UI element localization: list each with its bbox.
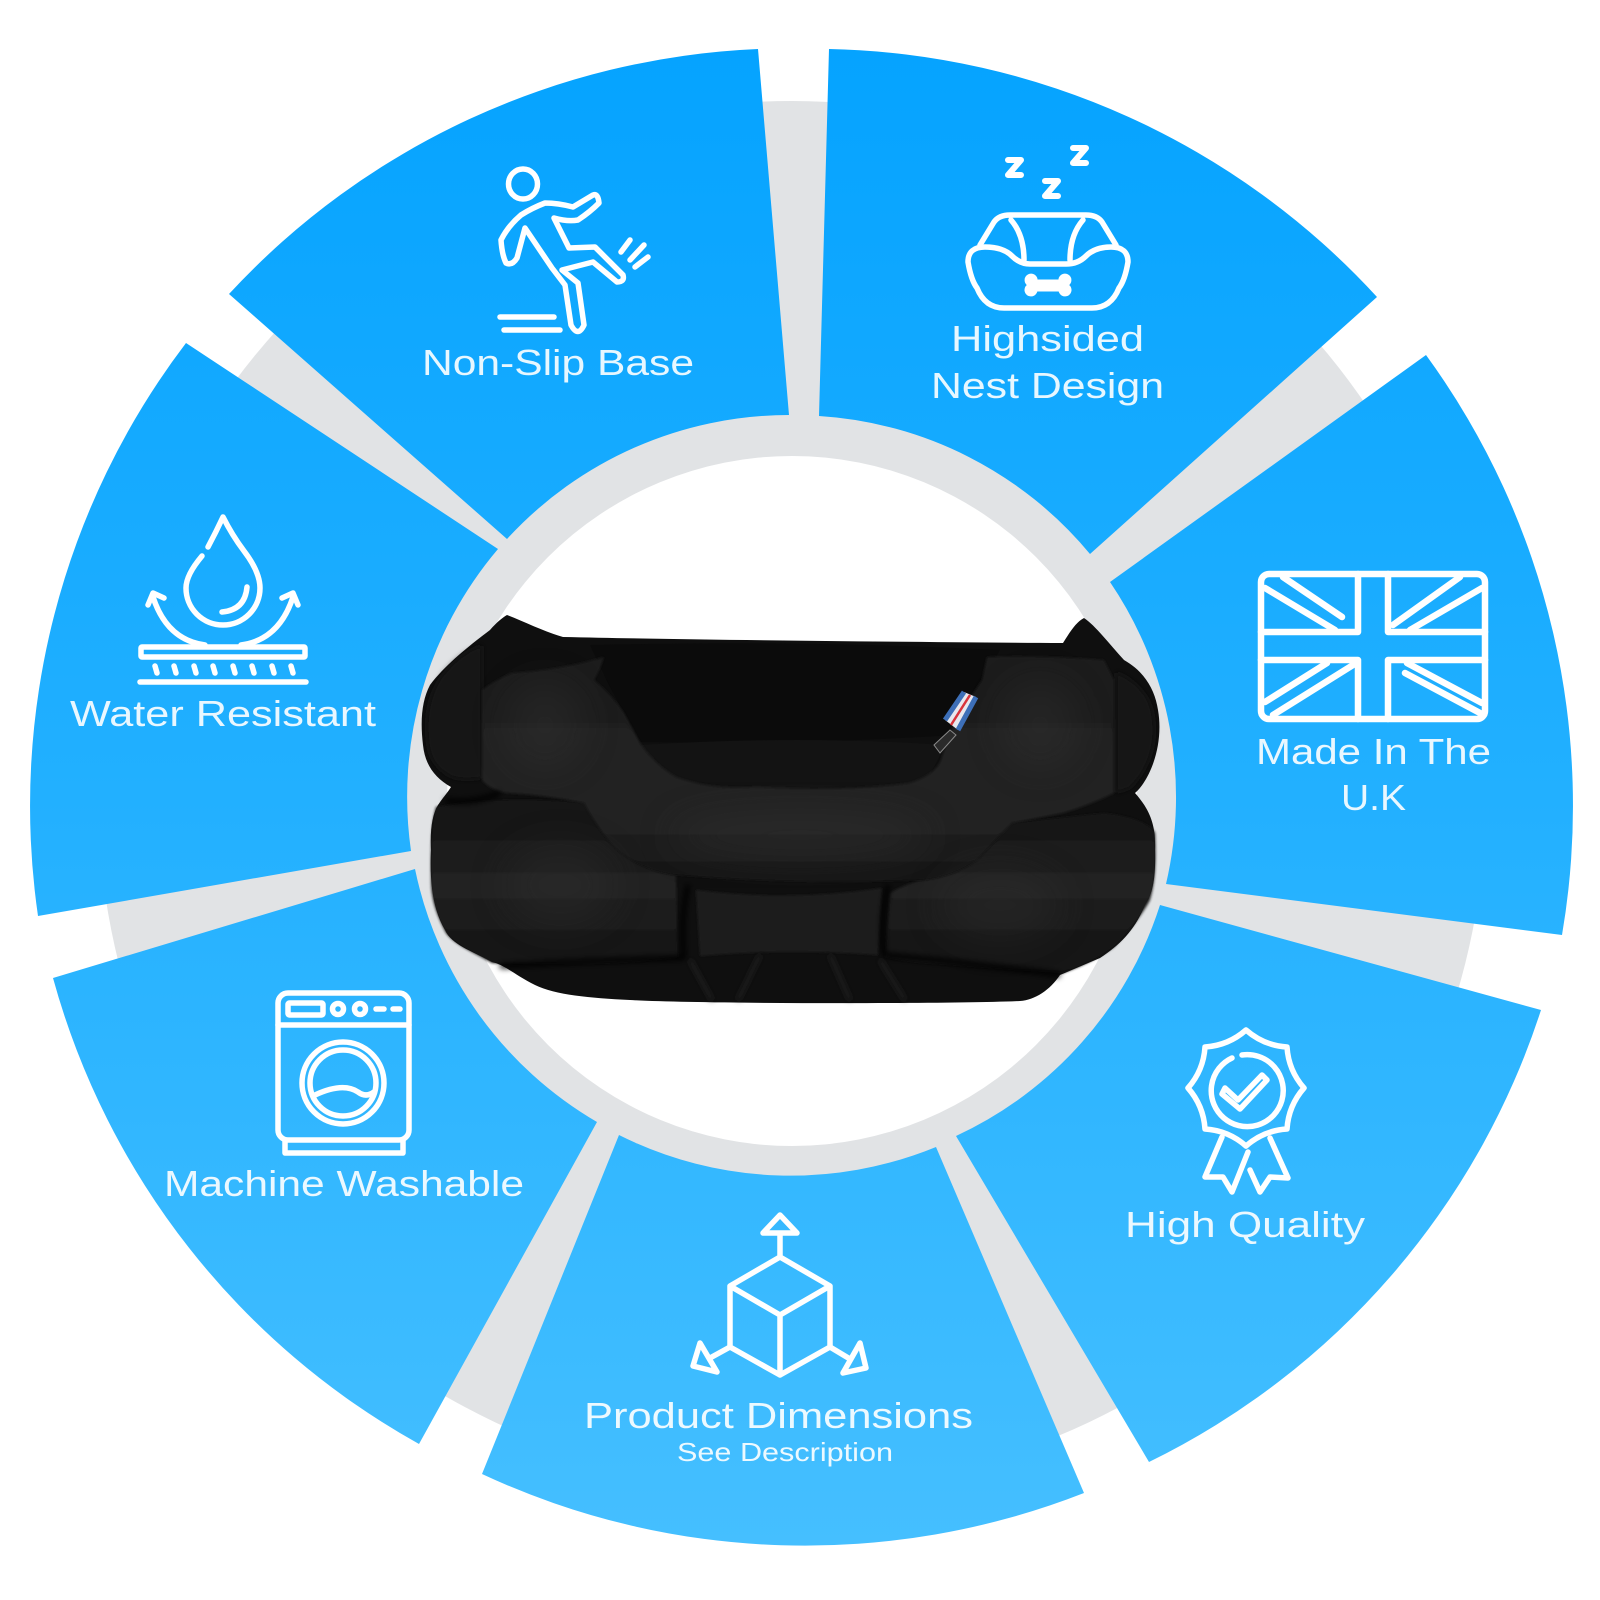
icon: water drop on fabric <box>140 517 306 682</box>
flag tag <box>945 692 976 730</box>
icon: cube with arrows <box>693 1215 866 1375</box>
segment shape <box>956 905 1541 1462</box>
product photo: black pet bed <box>422 615 1159 1003</box>
segment shape <box>1110 355 1573 935</box>
segment shape <box>482 1135 1084 1546</box>
brand tag <box>934 730 956 753</box>
grey ring behind the segments <box>98 101 1486 1489</box>
panel: made in the UK <box>1110 355 1573 935</box>
seat cushion <box>640 740 945 790</box>
upper outer side lumps <box>427 645 1154 793</box>
icon: union flag <box>1261 574 1485 719</box>
label: line 1: Highsided <box>951 318 1144 359</box>
segment shape <box>30 343 498 916</box>
panel creases <box>445 793 1060 975</box>
white centre circle <box>447 456 1137 1146</box>
back wall <box>590 643 1000 743</box>
label: Machine Washable <box>164 1163 524 1204</box>
icon: rosette badge <box>1188 1030 1304 1192</box>
panel: non-slip base <box>229 49 789 539</box>
bottom skirt folds <box>690 955 905 1000</box>
segment shape <box>819 49 1377 554</box>
icon: sleeping dog bed <box>968 148 1128 308</box>
label: line 2: U.K <box>1341 777 1406 818</box>
fabric sheen <box>670 811 930 859</box>
panel: water resistant <box>30 343 498 916</box>
front roll and arms <box>482 656 1114 882</box>
segment shape <box>229 49 789 539</box>
segment shape <box>53 869 597 1444</box>
panel: high quality <box>956 905 1541 1462</box>
icon: person slipping <box>500 169 648 332</box>
panel: machine washable <box>53 869 597 1444</box>
label: Non-Slip Base <box>422 342 694 383</box>
icon: washing machine <box>278 993 409 1153</box>
panel: highsided nest design <box>819 49 1377 554</box>
label: High Quality <box>1125 1204 1365 1245</box>
label: line 2: Nest Design <box>931 365 1164 406</box>
panel: product dimensions <box>482 1135 1084 1546</box>
label: line 1: Made In The <box>1256 731 1491 772</box>
lower bolsters <box>431 800 1155 973</box>
label: Water Resistant <box>70 693 376 734</box>
label: title: Product Dimensions <box>584 1395 973 1436</box>
label: subtitle: See Description <box>677 1437 893 1467</box>
front centre panel <box>696 888 882 956</box>
bed silhouette <box>422 615 1159 1003</box>
